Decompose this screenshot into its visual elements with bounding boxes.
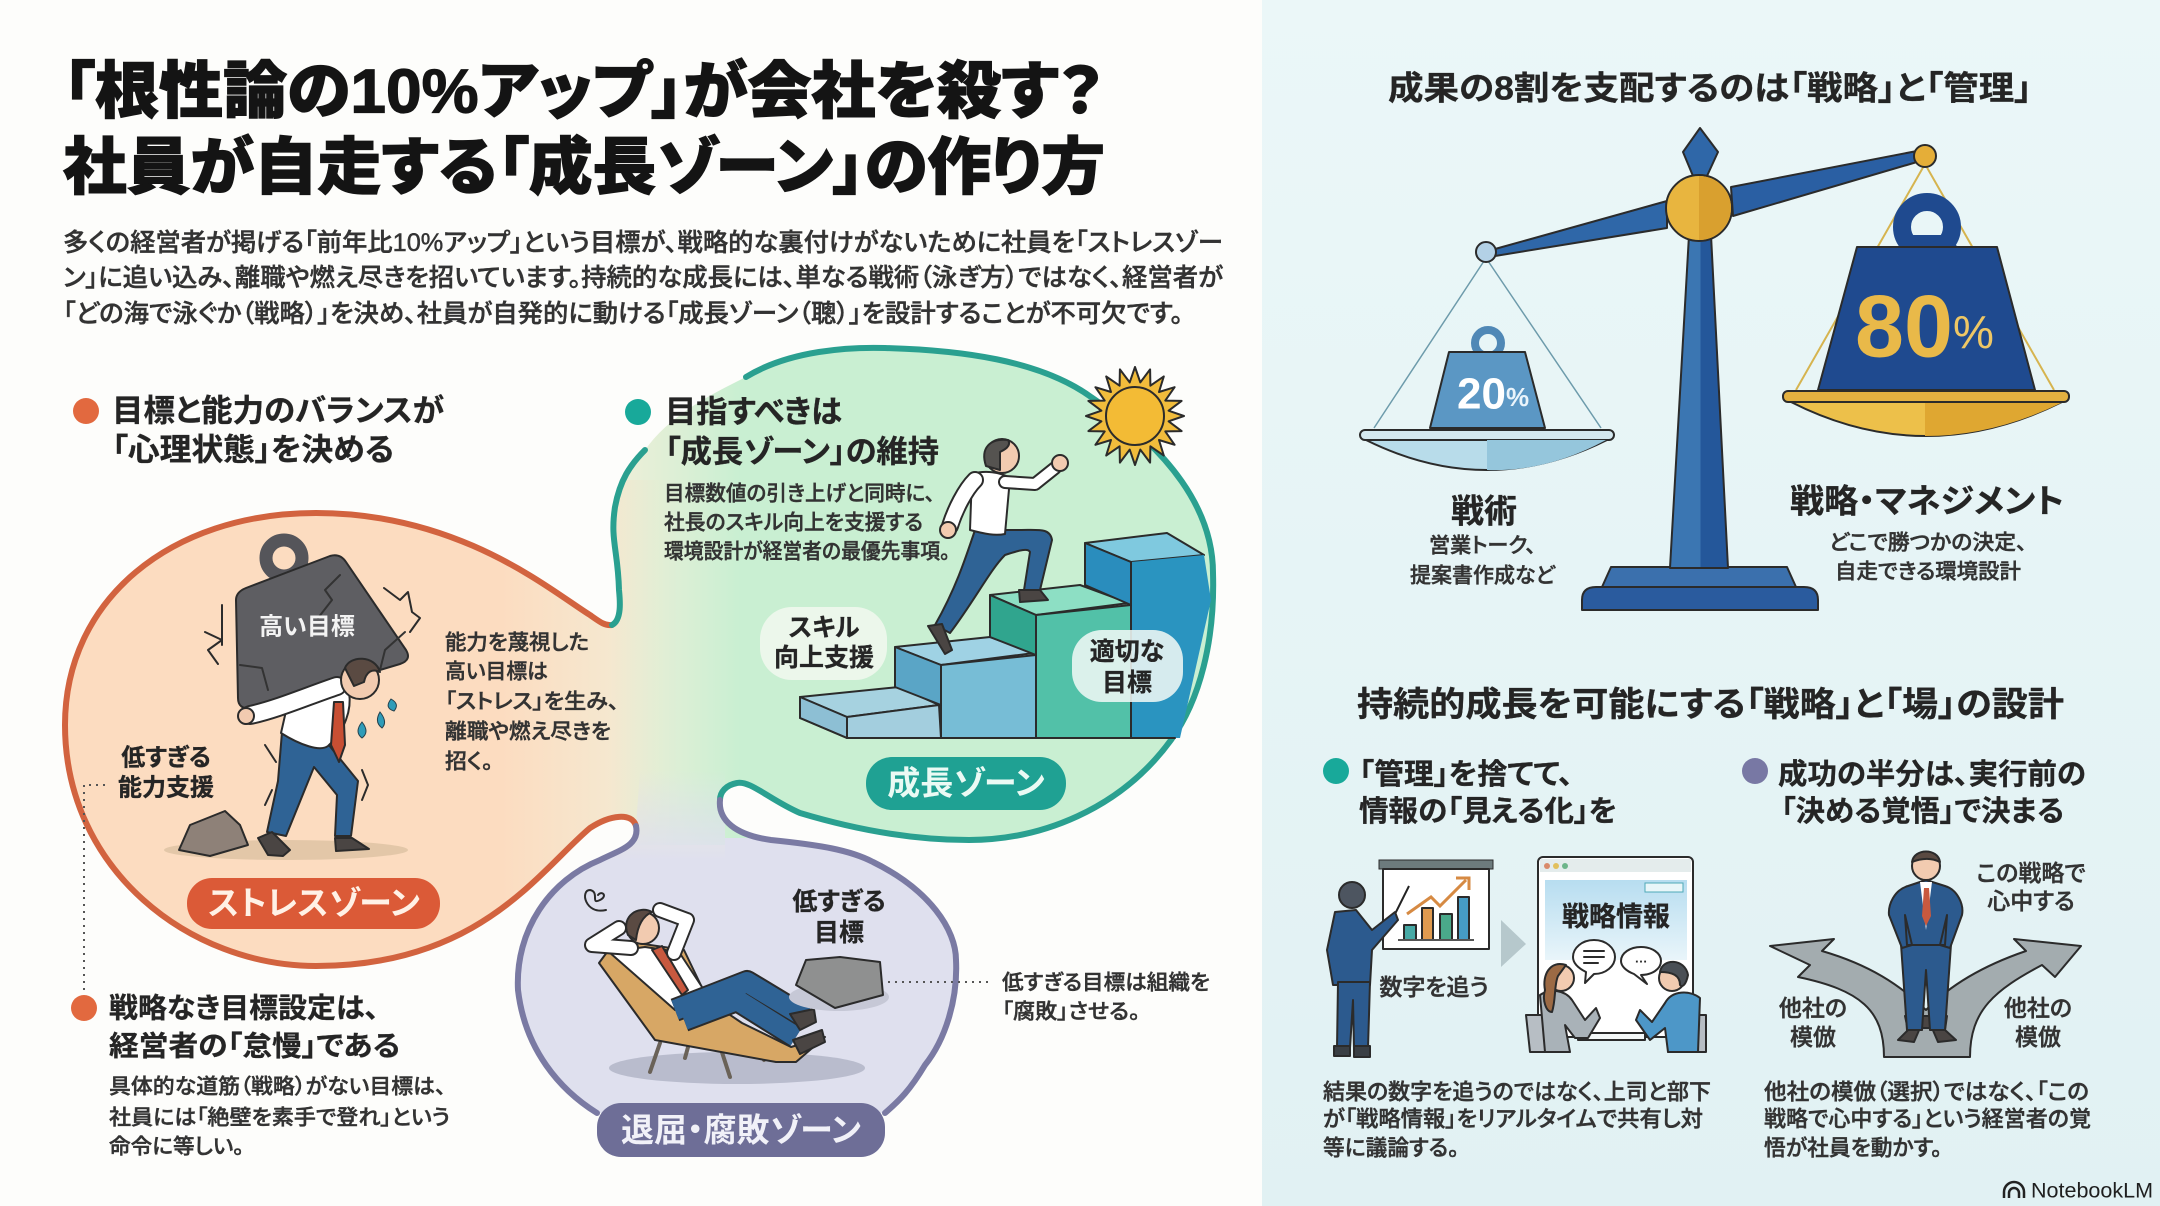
text block: goal setting without strategy: 戦略なき目標設定は、	[109, 992, 379, 1024]
label: proper target: 適切な	[1090, 638, 1164, 666]
pill: boredom zone: 退屈・腐敗ゾーン	[621, 1112, 861, 1148]
zone fills	[68, 350, 1210, 1113]
icon: sun	[1086, 367, 1184, 465]
label: imitation right	[2004, 995, 2072, 1050]
heading: balance: 「心理状態」を決める	[112, 432, 394, 468]
arrow: transition	[1501, 920, 1526, 967]
growth zone description: 社長のスキル向上を支援する	[664, 512, 923, 534]
label: imitation right: 他社の	[2004, 995, 2072, 1021]
label: all in on this strategy: 心中する	[1987, 888, 2075, 914]
label: tactics: 営業トーク、	[1429, 534, 1536, 558]
text block: conviction	[1764, 1080, 2091, 1160]
icon: lounging man on chair	[585, 890, 865, 1084]
stress zone description: 能力を蔑視した	[445, 632, 589, 654]
heading: balance: 目標と能力のバランスが	[112, 394, 444, 428]
left pan with 20 percent weight: 20	[1457, 370, 1506, 418]
scale hub	[1666, 175, 1732, 241]
scale base	[1582, 567, 1818, 610]
right pan with 80 percent weight: 80	[1855, 276, 1953, 376]
icon: discussion people: …	[1634, 950, 1648, 966]
text block: goal setting without strategy: 社員には「絶壁を素手で登れ」という	[109, 1106, 450, 1130]
heading: strategy and field design: 持続的成長を可能にする「戦略」と「場」の設計	[1357, 686, 2064, 724]
text block: goal setting without strategy: 経営者の「怠慢」である	[109, 1030, 400, 1062]
right pan with 80 percent weight: %	[1953, 306, 1994, 358]
pill: stress zone	[187, 878, 440, 929]
left pan strings	[1374, 258, 1601, 428]
label: imitation left	[1779, 995, 1847, 1050]
pill: stress zone: ストレスゾーン	[208, 884, 420, 922]
label: tactics: 戦術	[1451, 492, 1517, 530]
label: skill support: スキル	[788, 614, 860, 642]
scale beam	[1476, 145, 1936, 262]
pill: growth zone	[866, 757, 1066, 810]
title: 「根性論の10%アップ」が会社を殺す？	[63, 56, 1103, 126]
heading: growth zone	[625, 394, 939, 470]
title: 社員が自走する「成長ゾーン」の作り方	[63, 132, 1105, 202]
heading: drop management: 情報の「見える化」を	[1359, 795, 1617, 828]
heading: half of success	[1742, 758, 2086, 828]
label: strategy and management: 自走できる環境設計	[1835, 560, 2021, 584]
label: low support: 低すぎる	[121, 744, 211, 772]
icon: heavy weight	[205, 540, 420, 708]
text block: conviction: 悟が社員を動かす。	[1764, 1136, 1942, 1160]
callout: low target text: 低すぎる目標は組織を	[1002, 972, 1210, 994]
text block: information sharing: が「戦略情報」をリアルタイムで共有し対	[1323, 1106, 1703, 1132]
stress zone description	[445, 632, 619, 774]
stress zone description: 高い目標は	[445, 660, 548, 684]
stress zone description: 招く。	[445, 750, 493, 774]
pill: growth zone: 成長ゾーン	[887, 764, 1045, 802]
label: strategy and management	[1790, 482, 2064, 584]
heading: growth zone: 目指すべきは	[665, 394, 842, 430]
heading: half of success: 「決める覚悟」で決まる	[1781, 795, 2064, 828]
text block: goal setting without strategy: 命令に等しい。	[109, 1136, 244, 1158]
label: imitation right: 模倣	[2015, 1024, 2061, 1050]
logo: NotebookLM: NotebookLM	[2031, 1180, 2153, 1202]
right panel background	[1262, 0, 2160, 1206]
label: skill support	[760, 607, 887, 680]
label: all in on this strategy	[1976, 860, 2086, 914]
scale finial	[1683, 128, 1718, 176]
right pan strings	[1796, 164, 2054, 390]
icon: shared strategy screen	[1538, 857, 1693, 1037]
label: tactics	[1410, 492, 1556, 588]
heading: half of success: 成功の半分は、実行前の	[1778, 758, 2086, 791]
icon: small rock	[179, 811, 248, 856]
icon: heavy weight: 高い目標	[259, 614, 355, 640]
staircase	[800, 533, 1211, 738]
text block: information sharing	[1323, 1080, 1711, 1160]
heading: balance	[73, 394, 444, 468]
label: strategy and management: どこで勝つかの決定、	[1829, 532, 2027, 554]
icon: forked road with man	[1770, 852, 2081, 1057]
growth zone description: 環境設計が経営者の最優先事項。	[664, 540, 950, 564]
intro text block: 「どの海で泳ぐか（戦略）」を決め、社員が自発的に動ける「成長ゾーン（聰）」を設計することが不可欠です。	[63, 300, 1183, 328]
growth zone description	[664, 482, 950, 564]
callout: low target text: 「腐敗」させる。	[1002, 1000, 1140, 1024]
text block: information sharing: 結果の数字を追うのではなく、上司と部下	[1323, 1080, 1711, 1104]
label: all in on this strategy: この戦略で	[1976, 860, 2086, 886]
text block: conviction: 戦略で心中する」という経営者の覚	[1764, 1106, 2091, 1132]
stress zone description: 「ストレス」を生み、	[445, 690, 619, 714]
text block: goal setting without strategy	[71, 992, 450, 1158]
left pan with 20 percent weight: %	[1506, 382, 1529, 412]
right pan with 80 percent weight	[1783, 202, 2069, 436]
label: proper target: 目標	[1102, 669, 1152, 697]
icon: stressed man	[164, 659, 408, 860]
heading: drop management	[1323, 758, 1617, 828]
dotted leader line	[84, 785, 105, 990]
label: imitation left: 他社の	[1779, 995, 1847, 1021]
label: proper target	[1072, 630, 1183, 702]
icon: discussion people	[1526, 940, 1706, 1052]
label: low target	[792, 888, 886, 947]
heading: drop management: 「管理」を捨てて、	[1359, 758, 1573, 791]
text block: information sharing: 等に議論する。	[1323, 1136, 1459, 1160]
title	[63, 56, 1105, 202]
intro text block: 多くの経営者が掲げる「前年比10%アップ」という目標が、戦略的な裏付けがないために社員を「ストレスゾー	[63, 229, 1223, 257]
callout: low target text	[888, 972, 1210, 1024]
pill: boredom zone	[597, 1103, 885, 1157]
label: chase numbers: 数字を追う	[1379, 974, 1489, 1000]
icon: low target rock	[789, 957, 889, 1011]
left pan with 20 percent weight	[1360, 330, 1614, 470]
heading: growth zone: 「成長ゾーン」の維持	[665, 434, 939, 470]
icon: shared strategy screen: 戦略情報	[1562, 902, 1670, 932]
text block: conviction: 他社の模倣（選択）ではなく、「この	[1764, 1080, 2089, 1104]
label: imitation left: 模倣	[1790, 1024, 1836, 1050]
stress zone description: 離職や燃え尽きを	[445, 720, 611, 744]
text block: goal setting without strategy: 具体的な道筋（戦略）がない目標は、	[109, 1076, 446, 1098]
intro text block: ン」に追い込み、離職や燃え尽きを招いています。持続的な成長には、単なる戦術（泳ぎ方）ではなく、経営者が	[63, 264, 1223, 292]
label: low target: 目標	[814, 919, 864, 947]
heading: 80 percent: 成果の8割を支配するのは「戦略」と「管理」	[1388, 70, 2032, 106]
intro text block	[63, 229, 1223, 328]
zone outlines	[65, 348, 1213, 1113]
growth zone description: 目標数値の引き上げと同時に、	[664, 482, 935, 506]
balance scale chart	[1360, 128, 2069, 610]
icon: presenter with chart	[1327, 860, 1493, 1057]
label: strategy and management: 戦略・マネジメント	[1790, 482, 2064, 520]
label: low target: 低すぎる	[792, 888, 886, 916]
label: low support: 能力支援	[118, 774, 214, 802]
scale column	[1670, 235, 1728, 568]
label: low support	[118, 744, 214, 802]
label: skill support: 向上支援	[774, 644, 874, 672]
label: tactics: 提案書作成など	[1410, 564, 1556, 588]
panel: three psychological zones	[62, 344, 1216, 1157]
icon: climbing man	[928, 439, 1068, 654]
